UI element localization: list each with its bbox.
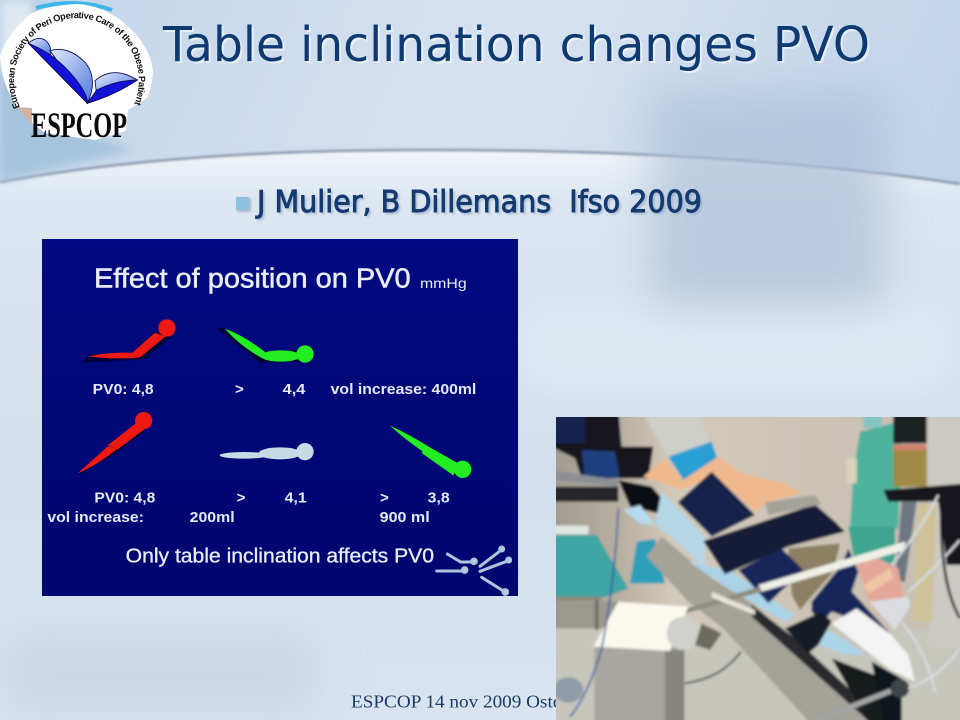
white support bar: [758, 542, 905, 592]
equipment right: [883, 483, 960, 565]
row 2 labels: 4,1: [285, 489, 307, 506]
row 1 labels: PV0: 4,8: [93, 381, 154, 398]
photo: patient on inclined operating table: [548, 408, 960, 720]
row 2 labels: 3,8: [428, 489, 450, 506]
row 1 labels: vol increase: 400ml: [331, 381, 476, 398]
background photo: scrubs: [0, 0, 135, 182]
logo mark: blue wings: [28, 38, 137, 103]
white sheet: [832, 608, 915, 682]
conclusion: Only table inclination affects PV0: [126, 544, 434, 567]
figure: flat pale: [220, 443, 314, 460]
figure: green head-down: [390, 426, 471, 478]
row 2 labels: PV0: 4,8: [94, 489, 155, 506]
logo name: ESPCOP: [31, 105, 127, 145]
panel heading: mmHg: [420, 275, 467, 291]
small position icons: [437, 547, 511, 594]
title: Table inclination changes PVO: [162, 17, 870, 73]
row 2 labels: 200ml: [190, 509, 235, 526]
teal drape table: [548, 535, 628, 598]
row 1 labels: 4,4: [283, 381, 306, 398]
foot box: [594, 647, 684, 720]
logo: ESPCOP: [0, 4, 153, 145]
logo skin patch: [16, 106, 33, 124]
row 2 labels: 900 ml: [380, 509, 430, 526]
navy padded straps: [678, 472, 755, 537]
figure: green legs raised: [216, 328, 314, 363]
surgeon in green: [850, 422, 902, 528]
black head of table: [618, 480, 663, 513]
panel: effect of position on PV0: [42, 239, 518, 596]
row 2 labels: >: [380, 489, 389, 506]
title: Table inclination changes PVO: [164, 19, 872, 75]
figure: red reverse tilt with legs flat: [82, 319, 176, 363]
row 1 labels: [93, 381, 476, 398]
row 2 labels: [47, 489, 450, 526]
light blue drape: [623, 505, 655, 525]
row 2 labels: >: [237, 489, 246, 506]
bullet marker: [237, 198, 251, 212]
lower rail: [812, 686, 894, 720]
wall and floor: [556, 417, 930, 630]
reference text: J Mulier, B Dillemans Ifso 2009: [257, 187, 704, 222]
logo disc: [0, 4, 153, 140]
figure: red steep tilt: [77, 412, 152, 476]
panel heading: Effect of position on PV0: [94, 262, 411, 293]
row 1 labels: >: [235, 381, 244, 398]
cyan arc behind logo: [36, 3, 112, 10]
bullet: J Mulier, B Dillemans Ifso 2009: [255, 185, 702, 220]
tubes: [570, 508, 618, 717]
footer: ESPCOP 14 nov 2009 Ostende: [351, 692, 589, 712]
logo ring text: [14, 18, 139, 107]
row 2 labels: vol increase:: [47, 509, 144, 526]
raised legs and cuff: [644, 417, 709, 456]
table column: [647, 537, 882, 720]
left equipment: [556, 417, 655, 480]
logo: ESPCOP: European Society of Peri Operative Care of the Obese Patient: [9, 12, 146, 109]
patient face: [856, 556, 904, 609]
